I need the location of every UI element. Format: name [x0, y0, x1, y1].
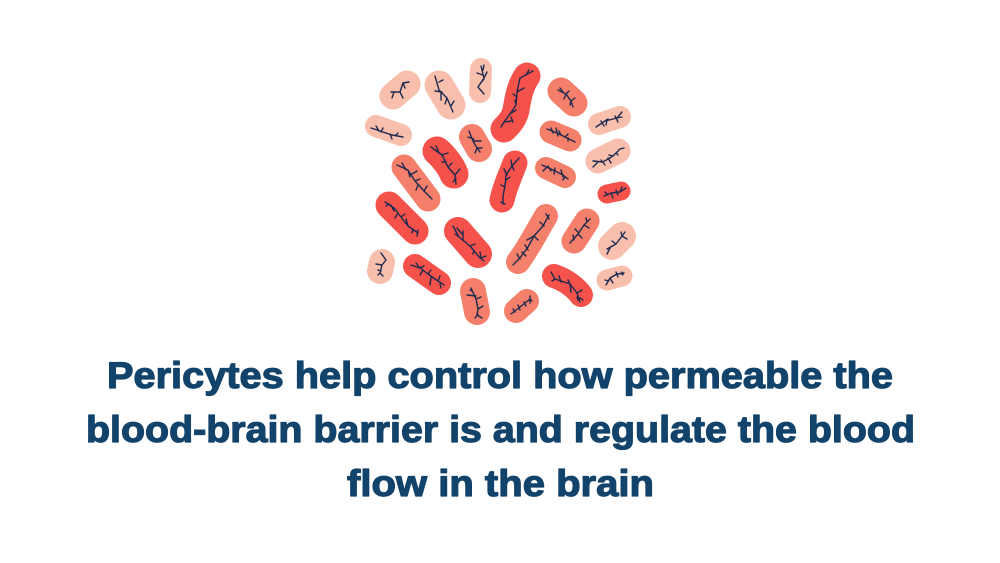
cell 5 — [468, 131, 482, 153]
cell 18 — [607, 232, 627, 254]
cell 17 — [570, 218, 590, 243]
cell 22 — [385, 202, 418, 236]
cell 1 — [391, 82, 409, 98]
cell 19 — [605, 272, 624, 285]
cell 13 — [542, 165, 568, 180]
cell 26 — [467, 288, 483, 318]
title line 2: blood-brain barrier is and regulate the blood — [86, 409, 915, 450]
cell 14 — [501, 158, 519, 204]
illustration: cluster of pericyte cells — [371, 65, 627, 318]
cell 9 — [558, 88, 575, 107]
cell 25 — [411, 263, 444, 288]
cell 20 — [551, 272, 583, 302]
cell 2 — [435, 76, 454, 112]
cell 7 — [397, 163, 432, 199]
cell 3 — [477, 65, 487, 94]
title line 1: Pericytes help control how permeable the — [107, 355, 893, 396]
cell 24 — [376, 253, 386, 276]
cell 16 — [513, 214, 549, 265]
cell 21 — [511, 296, 532, 314]
cell 8 — [501, 70, 533, 129]
cell 11 — [547, 128, 575, 142]
title text — [86, 355, 915, 504]
cell 10 — [596, 112, 622, 127]
title line 3: flow in the brain — [347, 463, 654, 504]
cell 4 — [371, 126, 403, 139]
cell 23 — [453, 226, 486, 261]
cell 12 — [593, 148, 624, 167]
cell 6 — [431, 146, 460, 184]
cell 15 — [604, 187, 626, 198]
